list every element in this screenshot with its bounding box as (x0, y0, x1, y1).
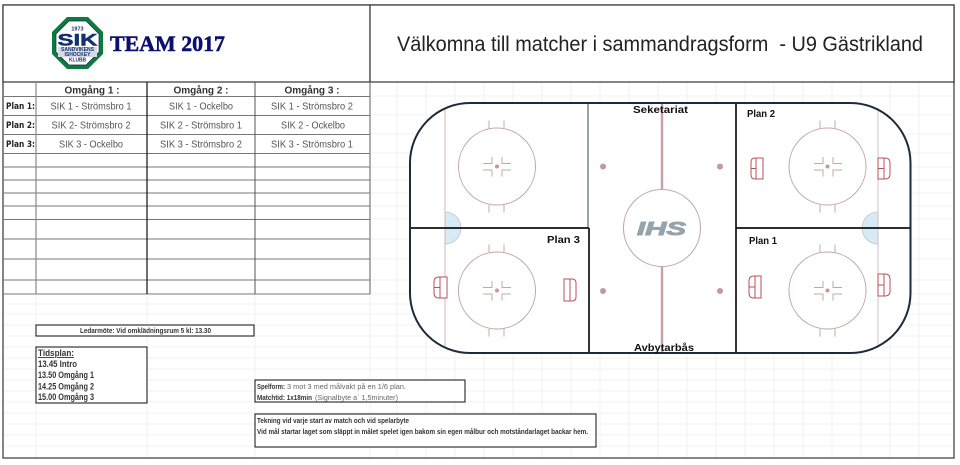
face-off circle: Plan top-left (458, 120, 536, 212)
match schedule table (3, 82, 370, 294)
hockey rink diagram (410, 103, 911, 354)
column headers (64, 84, 340, 96)
round 1 matches: SIK 2- Strömsbro 2 (52, 120, 131, 132)
time plan box: 14.25 Omgång 2 (38, 382, 94, 392)
rules box: Vid mål startar laget som släppt in målet spelet igen bakom sin egen målbur och motståndarlaget backar hem. (257, 428, 588, 436)
row labels: Plan 2: (6, 121, 35, 131)
game format box: 3 mot 3 med målvakt på en 1/6 plan. (287, 383, 406, 391)
game format box: (Signalbyte a` 1,5minuter) (315, 395, 398, 402)
label: Plan 3: Plan 3 (547, 234, 580, 246)
IHS centre logo: IHS (637, 219, 686, 239)
column headers: Omgång 2 : (173, 84, 229, 96)
title (370, 5, 954, 82)
leader meeting box (36, 325, 254, 336)
header panel: logo and team name (3, 5, 370, 82)
game format box: Matchtid: 1x18min (257, 395, 312, 402)
label: Avbytarbås: Avbytarbås (634, 342, 694, 354)
icon: SIK club logo: SIK (58, 30, 99, 50)
rink outline (410, 103, 910, 353)
round 3 matches: SIK 3 - Strömsbro 1 (271, 138, 353, 150)
face-off circle: Plan 1 (789, 244, 866, 336)
time plan box: Tidsplan: (38, 348, 74, 358)
round 1 matches (50, 100, 132, 150)
time plan box: 13.50 Omgång 1 (38, 370, 94, 380)
icon: SIK club logo: 1973 (71, 26, 84, 32)
round 2 matches: SIK 1 - Ockelbo (169, 100, 233, 112)
round 3 matches: SIK 1 - Strömsbro 2 (271, 100, 353, 112)
label: Plan 2: Plan 2 (747, 108, 775, 120)
neutral zone dots (600, 164, 723, 294)
time plan box: 13.45 Intro (38, 359, 77, 369)
column headers: Omgång 3 : (284, 84, 340, 96)
rules box: Tekning vid varje start av match och vid spelarbyte (257, 418, 409, 425)
round 2 matches: SIK 2 - Strömsbro 1 (160, 120, 242, 132)
icon: SIK club logo: SANDVIKENS (61, 47, 95, 53)
round 2 matches (160, 100, 242, 150)
round 3 matches: SIK 2 - Ockelbo (281, 120, 345, 132)
time plan box (36, 347, 147, 403)
column headers: Omgång 1 : (64, 84, 120, 96)
title: Välkomna till matcher i sammandragsform - U9 Gästrikland (397, 32, 923, 56)
label: Plan 1: Plan 1 (749, 235, 777, 247)
icon: SIK club logo: KLUBB (69, 58, 86, 64)
goal lines and centre line (445, 104, 878, 352)
icon: SIK club logo: ISHOCKEY (64, 52, 91, 58)
rules box (255, 414, 596, 447)
game format box (255, 380, 465, 402)
time plan box: 15.00 Omgång 3 (38, 392, 94, 402)
round 1 matches: SIK 1 - Strömsbro 1 (50, 100, 132, 112)
label: Seketariat: Seketariat (633, 104, 689, 116)
leader meeting box: Ledarmöte: Vid omklädningsrum 5 kl: 13.30 (80, 328, 211, 335)
round 3 matches (271, 100, 353, 150)
row labels: Plan 1: (6, 102, 35, 112)
row labels (6, 102, 35, 150)
small goals (434, 158, 890, 301)
zone dividers (410, 103, 911, 353)
team name: TEAM 2017 (110, 31, 225, 56)
icon: SIK club logo (52, 17, 103, 69)
round 1 matches: SIK 3 - Ockelbo (59, 138, 123, 150)
goal creases (445, 212, 878, 244)
round 2 matches: SIK 3 - Strömsbro 2 (160, 138, 242, 150)
row labels: Plan 3: (6, 140, 35, 150)
face-off circle: Plan 3 (458, 244, 536, 336)
centre circle (624, 190, 700, 266)
game format box: Spelform: (257, 384, 285, 391)
face-off circle: Plan 2 (789, 120, 866, 212)
